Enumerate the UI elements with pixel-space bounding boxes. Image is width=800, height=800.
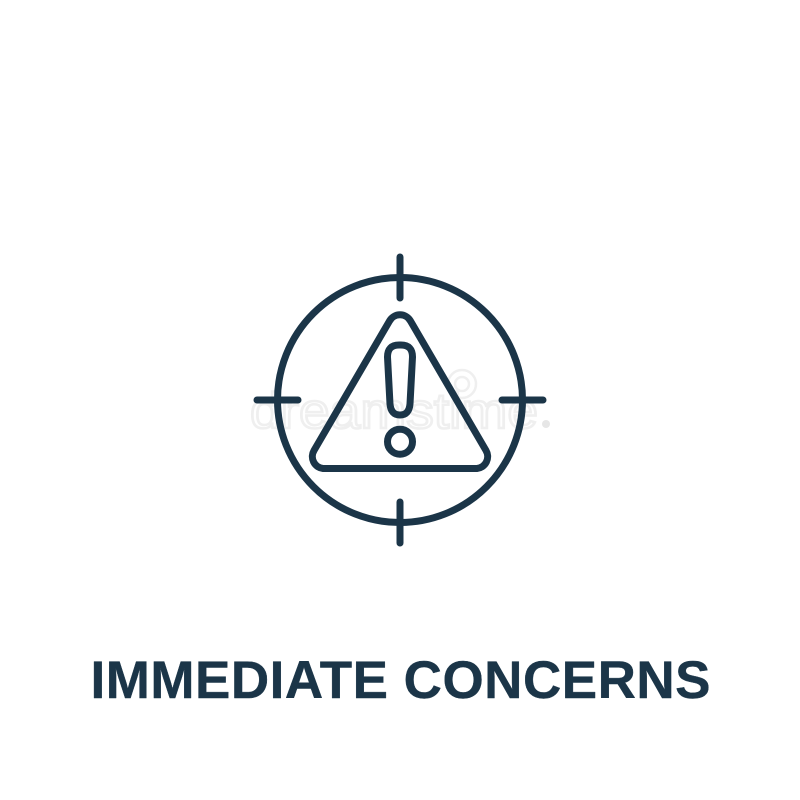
icon: exclamation dot [388, 429, 412, 454]
icon: warning triangle [312, 315, 488, 468]
icon: crosshair ticks [257, 257, 543, 543]
icon: target with warning triangle [257, 257, 543, 543]
title: IMMEDIATE CONCERNS [90, 651, 710, 710]
icon: target circle [278, 278, 522, 522]
watermark: dreamstime [250, 383, 538, 439]
icon: exclamation bar [388, 345, 412, 415]
